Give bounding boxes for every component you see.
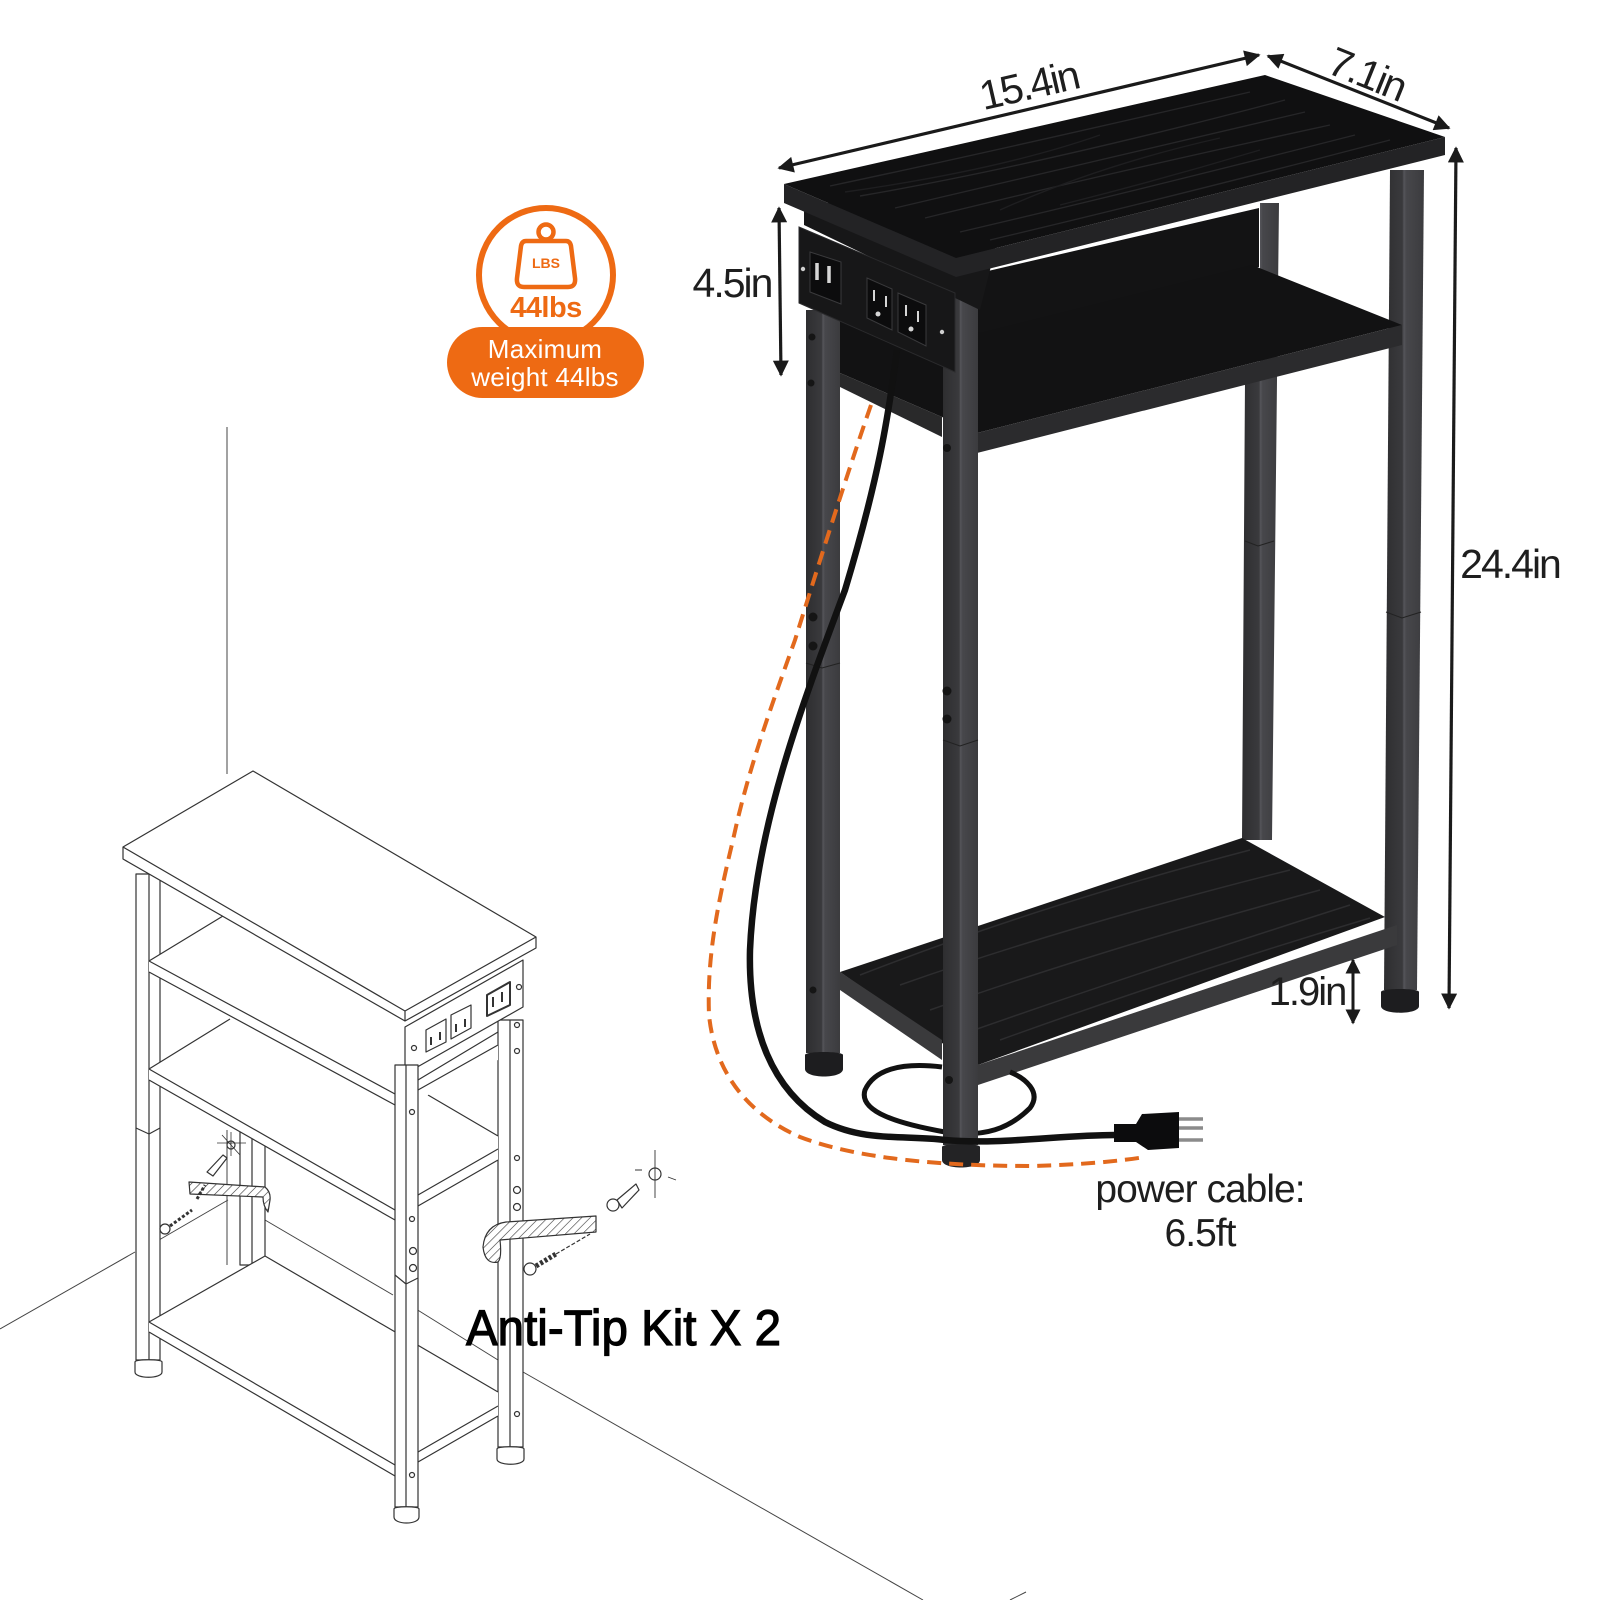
wall and floor lines [0, 427, 1026, 1600]
plug [1114, 1112, 1203, 1150]
label: power cable: power cable: [1095, 1168, 1305, 1211]
left anti-tip strap [160, 1132, 270, 1234]
arrow: top clearance [779, 208, 781, 375]
pill text: weight 44lbs [470, 362, 619, 392]
back leg [1242, 203, 1279, 840]
outlet two [898, 293, 926, 346]
arrow: width [779, 55, 1259, 168]
arrow: height [1449, 148, 1456, 1008]
apron under top [804, 203, 1000, 310]
label: power cable: 6.5ft [1165, 1212, 1237, 1255]
badge: maximum weight [447, 208, 644, 398]
line drawing: table with anti-tip kit [123, 771, 676, 1523]
label: depth: 7.1in [1322, 38, 1413, 110]
back panel [958, 208, 1259, 340]
arrow: ground clearance [1352, 960, 1354, 1023]
dimensions [693, 38, 1560, 1255]
front leg [394, 1065, 419, 1523]
power strip [799, 227, 955, 372]
right back leg [497, 1020, 524, 1464]
inner back leg [240, 1130, 265, 1265]
pill [447, 327, 644, 398]
USB ports [810, 252, 841, 304]
bottom shelf [149, 1256, 498, 1476]
label: ground clearance: 1.9in [1269, 970, 1345, 1014]
lower shelf [840, 838, 1397, 1085]
table photo [709, 75, 1445, 1168]
power strip line drawing [405, 960, 523, 1074]
table top [123, 771, 536, 1021]
label: width: 15.4in [975, 52, 1083, 119]
far right leg [1384, 170, 1424, 990]
kit label: Anti-Tip Kit X 2 [466, 1300, 781, 1356]
middle shelf [149, 1019, 498, 1220]
joint [1386, 612, 1421, 618]
pill text: Maximum [488, 334, 602, 364]
foot [1381, 989, 1419, 1013]
table top [784, 75, 1445, 277]
right leg screws [514, 1022, 520, 1416]
upper shelf [149, 916, 498, 1105]
main power cord [750, 350, 1115, 1141]
icon label LBS: LBS [532, 255, 560, 271]
left foot [805, 1052, 843, 1076]
outlet one [867, 278, 892, 330]
power cord loop [864, 1066, 1034, 1134]
upper shelf [840, 265, 1402, 453]
right anti-tip strap [483, 1150, 676, 1275]
icon: weight [517, 224, 575, 287]
weight circle [479, 208, 613, 342]
label: top clearance: 4.5in [693, 260, 772, 306]
left back leg [135, 874, 162, 1377]
middle foot [942, 1144, 980, 1168]
weight value: 44lbs [510, 292, 582, 324]
label: height: 24.4in [1460, 541, 1560, 587]
dashed cable length line [709, 405, 1145, 1166]
left leg [806, 310, 840, 1053]
wood grain [830, 92, 1390, 240]
arrow: depth [1268, 56, 1449, 128]
middle leg [942, 295, 978, 1145]
